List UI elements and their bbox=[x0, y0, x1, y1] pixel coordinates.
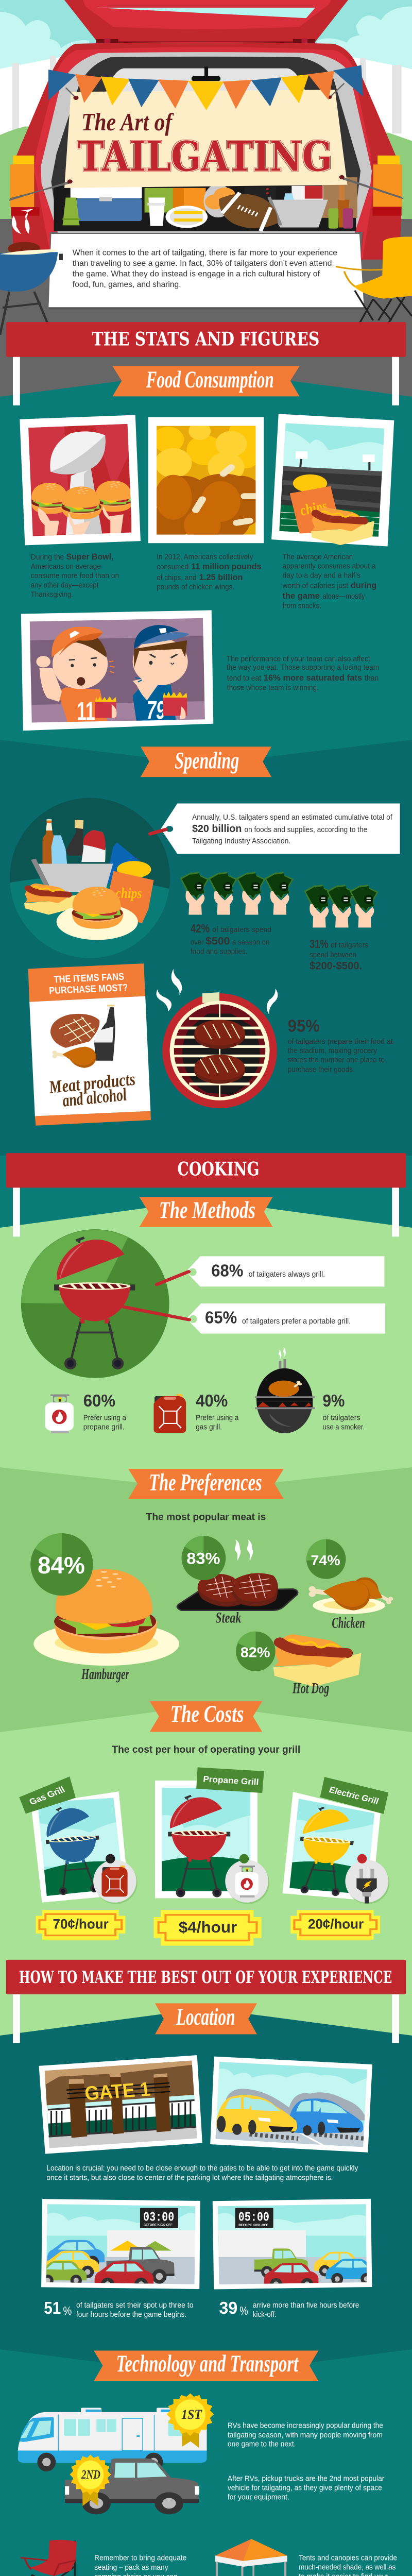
banner: cooking bbox=[6, 1153, 406, 1236]
stat: smoker 9 percent: of tailgaters bbox=[323, 1414, 360, 1422]
banner: how to make the best bbox=[6, 1960, 406, 2043]
stat: propane 60 percent: 60% bbox=[83, 1391, 115, 1410]
fact: super bowl: Super Bowl, bbox=[66, 552, 113, 562]
fact: calories: the game bbox=[282, 591, 320, 601]
stat: 39 percent: 39 bbox=[219, 2298, 237, 2317]
fact: team performance: 16% more saturated fats bbox=[264, 673, 362, 682]
stat: gas 40 percent: Prefer using a bbox=[196, 1414, 239, 1422]
stat: 42 percent: of tailgaters spend bbox=[212, 926, 271, 934]
fact: calories: day to a day and a half’s bbox=[282, 571, 360, 580]
fact: team performance bbox=[227, 655, 379, 692]
stat: propane 60 percent bbox=[45, 1391, 127, 1433]
intro panel: the game. What they do instead is engage in a rich cultural history of bbox=[73, 269, 320, 278]
tag: 65 percent: 65% bbox=[205, 1308, 237, 1327]
food: steak 83 percent bbox=[177, 1536, 298, 1626]
tag: 20 billion: on foods and supplies, according to the bbox=[244, 826, 367, 834]
fact: super bowl: During the bbox=[31, 553, 64, 562]
section: cooking bbox=[6, 1153, 406, 1378]
fact: super bowl: Americans on average bbox=[31, 563, 101, 571]
stat: 42 percent bbox=[191, 922, 271, 956]
card: electric grill bbox=[282, 1777, 389, 1904]
photo: parking 3 hours before: 03:00 bbox=[143, 2211, 174, 2225]
fact: chips and wings bbox=[157, 553, 262, 591]
photo: stadium chips and hot dog bbox=[271, 414, 394, 546]
text: seating: seating – pack as many bbox=[94, 2563, 168, 2571]
title: The Art of bbox=[81, 108, 174, 136]
stat: 51 percent: of tailgaters set their spot up three to bbox=[76, 2301, 194, 2310]
food: hot dog 82 percent bbox=[236, 1632, 362, 1697]
paragraph: location is crucial: once it starts, but also close to center of the parking lot where the tailgating atmosphere is. bbox=[46, 2174, 333, 2182]
ribbon: the methods: The Methods bbox=[159, 1197, 255, 1223]
fact: calories: from snacks. bbox=[282, 602, 321, 610]
stat: gas 40 percent: gas grill. bbox=[196, 1423, 222, 1431]
card: items fans purchase most: THE ITEMS FANS bbox=[54, 971, 125, 985]
text: pickup trucks bbox=[228, 2475, 385, 2501]
food: hamburger 84 percent bbox=[30, 1533, 179, 1683]
photo: yellow and blue cars bbox=[210, 2057, 372, 2153]
tag: 20 billion: Tailgating Industry Association. bbox=[192, 837, 290, 845]
ribbon: the preferences bbox=[128, 1469, 284, 1499]
stat: 95 percent: the stadium, making grocery bbox=[288, 1047, 377, 1055]
stat: smoker 9 percent bbox=[255, 1347, 365, 1433]
stat: 42 percent: a season on bbox=[232, 938, 269, 946]
food circle illustration: chips bbox=[115, 885, 142, 902]
text: pickup trucks: for your equipment. bbox=[228, 2493, 289, 2501]
stat: 31 percent: $200-$500. bbox=[310, 960, 362, 972]
fact: chips and wings: In 2012, Americans collectively bbox=[157, 553, 253, 561]
photo: parking 5 hours before: 05:00 bbox=[238, 2211, 269, 2225]
fact: calories: apparently consumes about a bbox=[282, 562, 376, 570]
fact: super bowl bbox=[31, 552, 119, 599]
intro panel: When it comes to the art of tailgating, there is far more to your experience bbox=[73, 248, 337, 257]
fact: super bowl: any other day—except bbox=[31, 581, 99, 589]
stat: propane 60 percent: Prefer using a bbox=[83, 1414, 127, 1422]
ribbon: spending bbox=[141, 747, 271, 777]
section: methods lower bbox=[30, 1347, 399, 1697]
price: 4 dollars: $4/hour bbox=[179, 1919, 237, 1936]
ribbon: the preferences: The Preferences bbox=[149, 1469, 262, 1496]
stat: 31 percent bbox=[310, 937, 368, 972]
stat: gas 40 percent: 40% bbox=[196, 1391, 228, 1410]
hanging sign bbox=[9, 83, 403, 200]
food: hamburger 84 percent: Hamburger bbox=[81, 1666, 130, 1683]
fact: chips and wings: 11 million pounds bbox=[191, 562, 262, 571]
fact: team performance: tend to eat bbox=[227, 674, 262, 682]
card: items fans purchase most: and alcohol bbox=[61, 1084, 128, 1111]
blue grill bbox=[0, 209, 63, 335]
fact: super bowl: Thanksgiving. bbox=[31, 590, 73, 599]
stat: 31 percent: 31% bbox=[310, 937, 329, 951]
price: 20 cents bbox=[290, 1910, 380, 1940]
ribbon: food consumption bbox=[112, 366, 300, 396]
car tailgate door bbox=[64, 0, 348, 51]
icon: canopy tent bbox=[215, 2539, 287, 2576]
fact: chips and wings: consumed bbox=[157, 563, 188, 571]
fact: calories bbox=[282, 553, 376, 610]
food: hamburger 84 percent: 84% bbox=[38, 1552, 85, 1579]
fact: calories: The average American bbox=[282, 553, 353, 561]
photo: gate 1 bbox=[39, 2055, 202, 2154]
section: technology and transport bbox=[18, 2350, 397, 2576]
stat: gas 40 percent bbox=[153, 1391, 239, 1433]
photo: chips and chicken wings bbox=[145, 417, 265, 543]
tag: 68 percent bbox=[186, 1256, 384, 1286]
photo: parking 3 hours before: BEFORE KICK-OFF bbox=[144, 2223, 173, 2227]
banner: cooking: COOKING bbox=[177, 1158, 260, 1180]
food: steak 83 percent: Steak bbox=[215, 1609, 242, 1626]
stat: smoker 9 percent: 9% bbox=[323, 1391, 345, 1410]
stat: 95 percent bbox=[288, 1016, 393, 1074]
photo: parking 3 hours before bbox=[37, 2199, 200, 2291]
card: propane grill bbox=[155, 1767, 269, 1904]
stat: 42 percent: $500 bbox=[205, 935, 230, 947]
stat: 39 percent bbox=[219, 2298, 359, 2319]
stat: 51 percent: % bbox=[63, 2303, 72, 2317]
yellow camping chair bbox=[336, 236, 412, 323]
stat: propane 60 percent: propane grill. bbox=[83, 1423, 125, 1431]
tag: 68 percent: of tailgaters always grill. bbox=[249, 1270, 325, 1279]
food: steak 83 percent: 83% bbox=[186, 1550, 220, 1567]
illustration: grill top with steaks bbox=[157, 969, 278, 1108]
ribbon: location bbox=[155, 2003, 257, 2035]
section: costs bbox=[19, 1701, 389, 1946]
fact: team performance: than bbox=[365, 674, 379, 682]
cargo items in trunk bbox=[62, 177, 357, 238]
bunting flags bbox=[48, 65, 363, 110]
banner: the stats and figures bbox=[6, 322, 406, 405]
subheading: most popular meat: The most popular meat is bbox=[146, 1511, 266, 1522]
title bbox=[78, 108, 332, 181]
vehicle: rv with 1st badge: 1ST bbox=[181, 2407, 202, 2422]
ribbon: spending: Spending bbox=[175, 748, 239, 774]
stat: 95 percent: purchase their goods. bbox=[288, 1065, 355, 1074]
ribbon: technology and transport bbox=[94, 2350, 318, 2381]
fact: chips and wings: of chips, and bbox=[157, 573, 197, 582]
photo: stadium chips and hot dog: chips bbox=[298, 498, 330, 519]
stat: 51 percent: four hours before the game begins. bbox=[76, 2311, 186, 2319]
photo: two fans: 79 bbox=[147, 696, 165, 724]
fact: super bowl: consume more food than on bbox=[31, 572, 119, 580]
food circle illustration bbox=[8, 798, 174, 960]
price: 70 cents bbox=[36, 1910, 125, 1940]
photo: two fans: 11 bbox=[77, 697, 95, 725]
food: chicken 74 percent bbox=[306, 1539, 399, 1632]
card: items fans purchase most: Meat products bbox=[47, 1069, 136, 1097]
vehicle: pickup with 2nd badge bbox=[65, 2454, 199, 2514]
fact: calories: worth of calories just bbox=[282, 582, 348, 590]
stat: 51 percent: 51 bbox=[44, 2298, 61, 2317]
stat: 42 percent: 42% bbox=[191, 922, 210, 935]
photo: gate 1: GATE 1 bbox=[83, 2078, 151, 2105]
fact: chips and wings: pounds of chicken wings. bbox=[157, 583, 234, 591]
tag: 68 percent: 68% bbox=[211, 1261, 243, 1280]
card: gas grill bbox=[19, 1776, 138, 1904]
intro panel: food, fun, games, and sharing. bbox=[73, 280, 181, 289]
photo: super bowl trophy with burgers bbox=[20, 415, 141, 545]
section 2: food consumption bbox=[6, 322, 406, 731]
text: rvs: one game to the next. bbox=[228, 2440, 296, 2448]
stat: 42 percent: food and supplies. bbox=[191, 947, 248, 956]
price: 20 cents: 20¢/hour bbox=[308, 1917, 364, 1932]
text: seating: Remember to bring adequate bbox=[94, 2554, 186, 2562]
card: items fans purchase most bbox=[28, 963, 151, 1126]
fact: calories: during bbox=[351, 580, 376, 590]
icons: three hands of cash bbox=[304, 885, 379, 927]
ribbon: location: Location bbox=[176, 2004, 235, 2030]
card: propane grill: Propane Grill bbox=[203, 1774, 259, 1787]
subheading: cost per hour: The cost per hour of operating your grill bbox=[112, 1744, 300, 1755]
ribbon: the methods bbox=[139, 1197, 273, 1227]
stat: 31 percent: of tailgaters bbox=[331, 941, 368, 950]
fact: chips and wings: 1.25 billion bbox=[199, 572, 243, 582]
vehicle: pickup with 2nd badge: 2ND bbox=[81, 2468, 100, 2482]
tag: 20 billion: $20 billion bbox=[192, 823, 242, 835]
stat: 39 percent: kick-off. bbox=[253, 2311, 277, 2319]
fact: team performance: The performance of your team can also affect bbox=[227, 655, 370, 663]
food: chicken 74 percent: 74% bbox=[311, 1552, 340, 1568]
card: items fans purchase most: PURCHASE MOST? bbox=[49, 982, 128, 996]
vehicle: rv with 1st badge bbox=[18, 2393, 214, 2471]
car body bbox=[10, 42, 402, 260]
tag: 20 billion bbox=[150, 804, 400, 854]
text: rvs bbox=[228, 2421, 383, 2448]
ribbon: food consumption: Food Consumption bbox=[146, 367, 274, 393]
stat: 95 percent: stores the number one place to bbox=[288, 1056, 385, 1064]
tag: 65 percent: of tailgaters prefer a portable grill. bbox=[242, 1317, 351, 1326]
food: hot dog 82 percent: Hot Dog bbox=[292, 1680, 329, 1697]
stat: 51 percent bbox=[44, 2298, 194, 2319]
card: electric grill: Electric Grill bbox=[328, 1785, 380, 1806]
stat: 39 percent: arrive more than five hours before bbox=[253, 2301, 359, 2310]
price: 4 dollars bbox=[153, 1910, 262, 1946]
section: spending bbox=[8, 747, 400, 1126]
photo: parking 5 hours before bbox=[213, 2199, 377, 2291]
intro panel: than traveling to see a game. In fact, 30% of tailgaters don’t even attend bbox=[73, 259, 332, 268]
stat: 95 percent: 95% bbox=[288, 1016, 320, 1036]
text: tents bbox=[299, 2554, 397, 2576]
intro panel bbox=[48, 234, 364, 309]
text: seating bbox=[94, 2554, 186, 2576]
photo: parking 5 hours before: BEFORE KICK-OFF bbox=[238, 2223, 268, 2227]
stat: 42 percent: over bbox=[191, 938, 204, 946]
hero: open car trunk scene bbox=[0, 0, 412, 335]
paragraph: location is crucial bbox=[46, 2164, 358, 2182]
card: gas grill: Gas Grill bbox=[27, 1785, 67, 1807]
stat: 31 percent: spend between bbox=[310, 951, 356, 959]
food: chicken 74 percent: Chicken bbox=[332, 1615, 365, 1632]
price: 70 cents: 70¢/hour bbox=[53, 1917, 109, 1932]
pie with red grill bbox=[21, 1229, 189, 1378]
tag: 65 percent bbox=[186, 1303, 385, 1333]
stat: smoker 9 percent: use a smoker. bbox=[323, 1423, 365, 1431]
stat: 39 percent: % bbox=[239, 2303, 248, 2317]
ribbon: the costs: The Costs bbox=[170, 1701, 244, 1727]
section: location bbox=[6, 1960, 406, 2319]
food: hot dog 82 percent: 82% bbox=[241, 1644, 270, 1660]
icons: four hands of cash bbox=[180, 872, 294, 915]
ribbon: the costs bbox=[150, 1701, 262, 1732]
icon: red camping chair bbox=[21, 2540, 77, 2576]
fact: team performance: those whose team is winning. bbox=[227, 684, 319, 692]
fact: calories: alone—mostly bbox=[323, 592, 365, 601]
photo: two fans bbox=[21, 610, 213, 731]
